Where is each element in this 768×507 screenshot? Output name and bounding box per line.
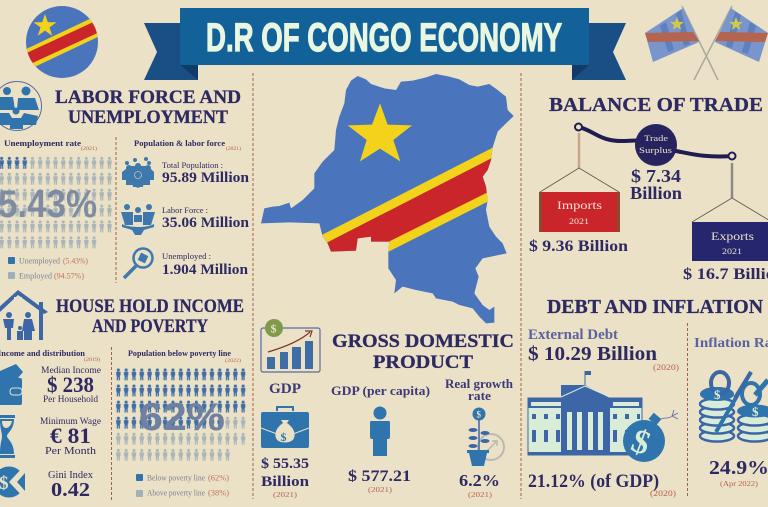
text: real growth rate: rate (468, 389, 491, 403)
poverty label (128, 348, 241, 364)
icon: house and family (0, 290, 48, 340)
text: growth value: (2021) (468, 491, 493, 499)
unemployment rate label: (2021) (81, 145, 97, 152)
heading: GROSS DOMESTIC (332, 331, 514, 352)
text: growth value (459, 471, 500, 499)
text: real growth rate: Real growth (445, 377, 513, 391)
legend: poverty (136, 474, 229, 498)
text: imports value: $ 9.36 Billion (529, 238, 628, 255)
text: gdp: GDP (269, 381, 301, 397)
icon: person (370, 406, 390, 456)
text: growth value: 6.2% (459, 471, 500, 490)
icon: round flag (26, 6, 98, 78)
poverty label: (2022) (225, 357, 241, 364)
text: total population: Total Population : (162, 161, 223, 170)
panel: balance of trade (529, 94, 768, 283)
heading (56, 296, 244, 337)
icon: coins and percent: $ (714, 387, 721, 402)
imports container: Imports (557, 198, 602, 212)
heading: AND POVERTY (92, 316, 208, 337)
text: debt percent: 21.12% (of GDP) (528, 471, 659, 492)
text: external debt: $ 10.29 Billion (528, 343, 657, 365)
legend: unemployment: (94.57%) (54, 272, 84, 280)
heading (332, 331, 514, 373)
icon: labor force (121, 204, 155, 235)
text: median income: Per Household (43, 394, 99, 404)
unemployment rate label (4, 138, 97, 152)
text: surplus value: Billion (630, 183, 682, 203)
text: surplus value (630, 166, 682, 203)
panel: gross domestic product (261, 319, 514, 499)
text: external debt: (2020) (653, 363, 679, 372)
text: minimum wage: Per Month (45, 446, 96, 457)
icon: bomb: $ (626, 422, 655, 463)
text: labor force: Labor Force : (162, 206, 208, 215)
title banner (144, 8, 626, 80)
legend: unemployment: Employed (19, 272, 52, 280)
text: inflation value: (Apr 2022) (720, 480, 759, 488)
text: per capita value: $ 577.21 (348, 468, 411, 485)
icon: briefcase (261, 407, 309, 448)
text: gdp value: Billion (261, 474, 310, 490)
text: external debt: External Debt (528, 327, 618, 343)
legend: poverty: (62%) (208, 474, 229, 482)
imports container: 2021 (569, 216, 589, 226)
legend: unemployment: Unemployed (19, 256, 60, 266)
icon: bomb (623, 410, 678, 463)
text: gini index: Gini Index (48, 470, 93, 481)
icon: gini chart (0, 464, 26, 500)
text: gini index: 0.42 (51, 479, 90, 501)
text: gini index (48, 470, 93, 501)
income label: Income and distribution (0, 348, 85, 358)
text: unemployed: Unemployed : (162, 252, 211, 261)
icon: magnifier (124, 248, 152, 278)
text: surplus value: $ 7.34 (631, 166, 681, 186)
text: gdp per capita: GDP (per capita) (331, 383, 430, 398)
map: DR Congo flag map (261, 74, 514, 323)
scale beam (575, 124, 736, 160)
text: median income: $ 238 (47, 372, 94, 397)
text: inflation value (709, 457, 768, 488)
population label: (2021) (226, 145, 241, 152)
income label: (2019) (84, 356, 100, 363)
heading: LABOR FORCE AND (55, 87, 241, 108)
title: D.R OF CONGO ECONOMY (206, 16, 562, 60)
exports container: Exports (711, 231, 755, 243)
icon: coins and percent (700, 372, 768, 442)
text: median income: Median Income (41, 366, 101, 376)
icon: crossed flags (645, 6, 768, 80)
text: per capita value (348, 468, 411, 494)
population label: Population & labor force (134, 138, 225, 148)
legend: unemployment (8, 256, 88, 280)
population label (134, 138, 241, 152)
heading: DEBT AND INFLATION (547, 296, 763, 318)
icon: gdp chart (261, 319, 320, 372)
text: minimum wage (40, 417, 101, 457)
heading: HOUSE HOLD INCOME (56, 296, 244, 317)
text: minimum wage: € 81 (50, 423, 91, 448)
icon: workers (0, 82, 42, 130)
icon: growth plant (467, 408, 504, 466)
imports container (539, 133, 620, 232)
exports container (692, 163, 768, 261)
icon: population crowd (122, 157, 154, 188)
trade surplus badge (635, 124, 677, 166)
panel: debt and inflation (528, 296, 768, 498)
text: gdp value: $ 55.35 (261, 456, 309, 472)
text: total population: 95.89 Million (162, 170, 250, 186)
legend: poverty: Above poverty line (147, 488, 205, 498)
icon: hourglass (0, 415, 15, 458)
trade surplus badge: Surplus (639, 145, 672, 155)
people chart: poverty: 62% (139, 396, 225, 439)
icon: wallet (0, 364, 23, 405)
text: total population (162, 161, 250, 186)
text: median income (41, 366, 101, 404)
icon: growth plant: $ (476, 410, 482, 420)
text: real growth rate (445, 377, 513, 403)
unemployment rate label: Unemployment rate (4, 138, 81, 148)
text: gdp value: (2021) (273, 491, 298, 499)
heading (55, 87, 241, 128)
icon: briefcase: $ (280, 430, 286, 444)
text: unemployed (162, 252, 249, 278)
text: external debt (528, 327, 679, 372)
text: inflation value: 24.9% (709, 457, 768, 479)
poverty label: Population below poverty line (128, 348, 231, 358)
text: per capita value: (2021) (368, 486, 393, 494)
people chart: unemployment: 5.43% (0, 183, 97, 226)
icon: government building (528, 371, 642, 455)
text: debt percent: (2020) (650, 489, 676, 498)
icon: coins and percent: $ (752, 404, 759, 419)
people chart: unemployment (0, 155, 113, 250)
legend: poverty: (38%) (208, 488, 229, 498)
text: labor force: 35.06 Million (162, 215, 250, 231)
text: minimum wage: Minimum Wage (40, 417, 101, 427)
trade surplus badge: Trade (644, 133, 668, 143)
panel: labor force and unemployment (0, 82, 250, 280)
heading: PRODUCT (373, 352, 473, 373)
income label (0, 348, 100, 363)
text: gdp value (261, 456, 310, 499)
text: unemployed: 1.904 Million (162, 262, 249, 278)
legend: unemployment: (5.43%) (63, 256, 88, 266)
icon: gdp chart: $ (270, 322, 276, 336)
legend: poverty: Below poverty line (147, 474, 205, 482)
heading: UNEMPLOYMENT (68, 107, 228, 128)
people chart: poverty (114, 366, 248, 463)
exports container: 2021 (722, 246, 742, 256)
panel: household income and poverty (0, 290, 248, 501)
heading: BALANCE OF TRADE (549, 94, 763, 116)
text: labor force (162, 206, 250, 231)
